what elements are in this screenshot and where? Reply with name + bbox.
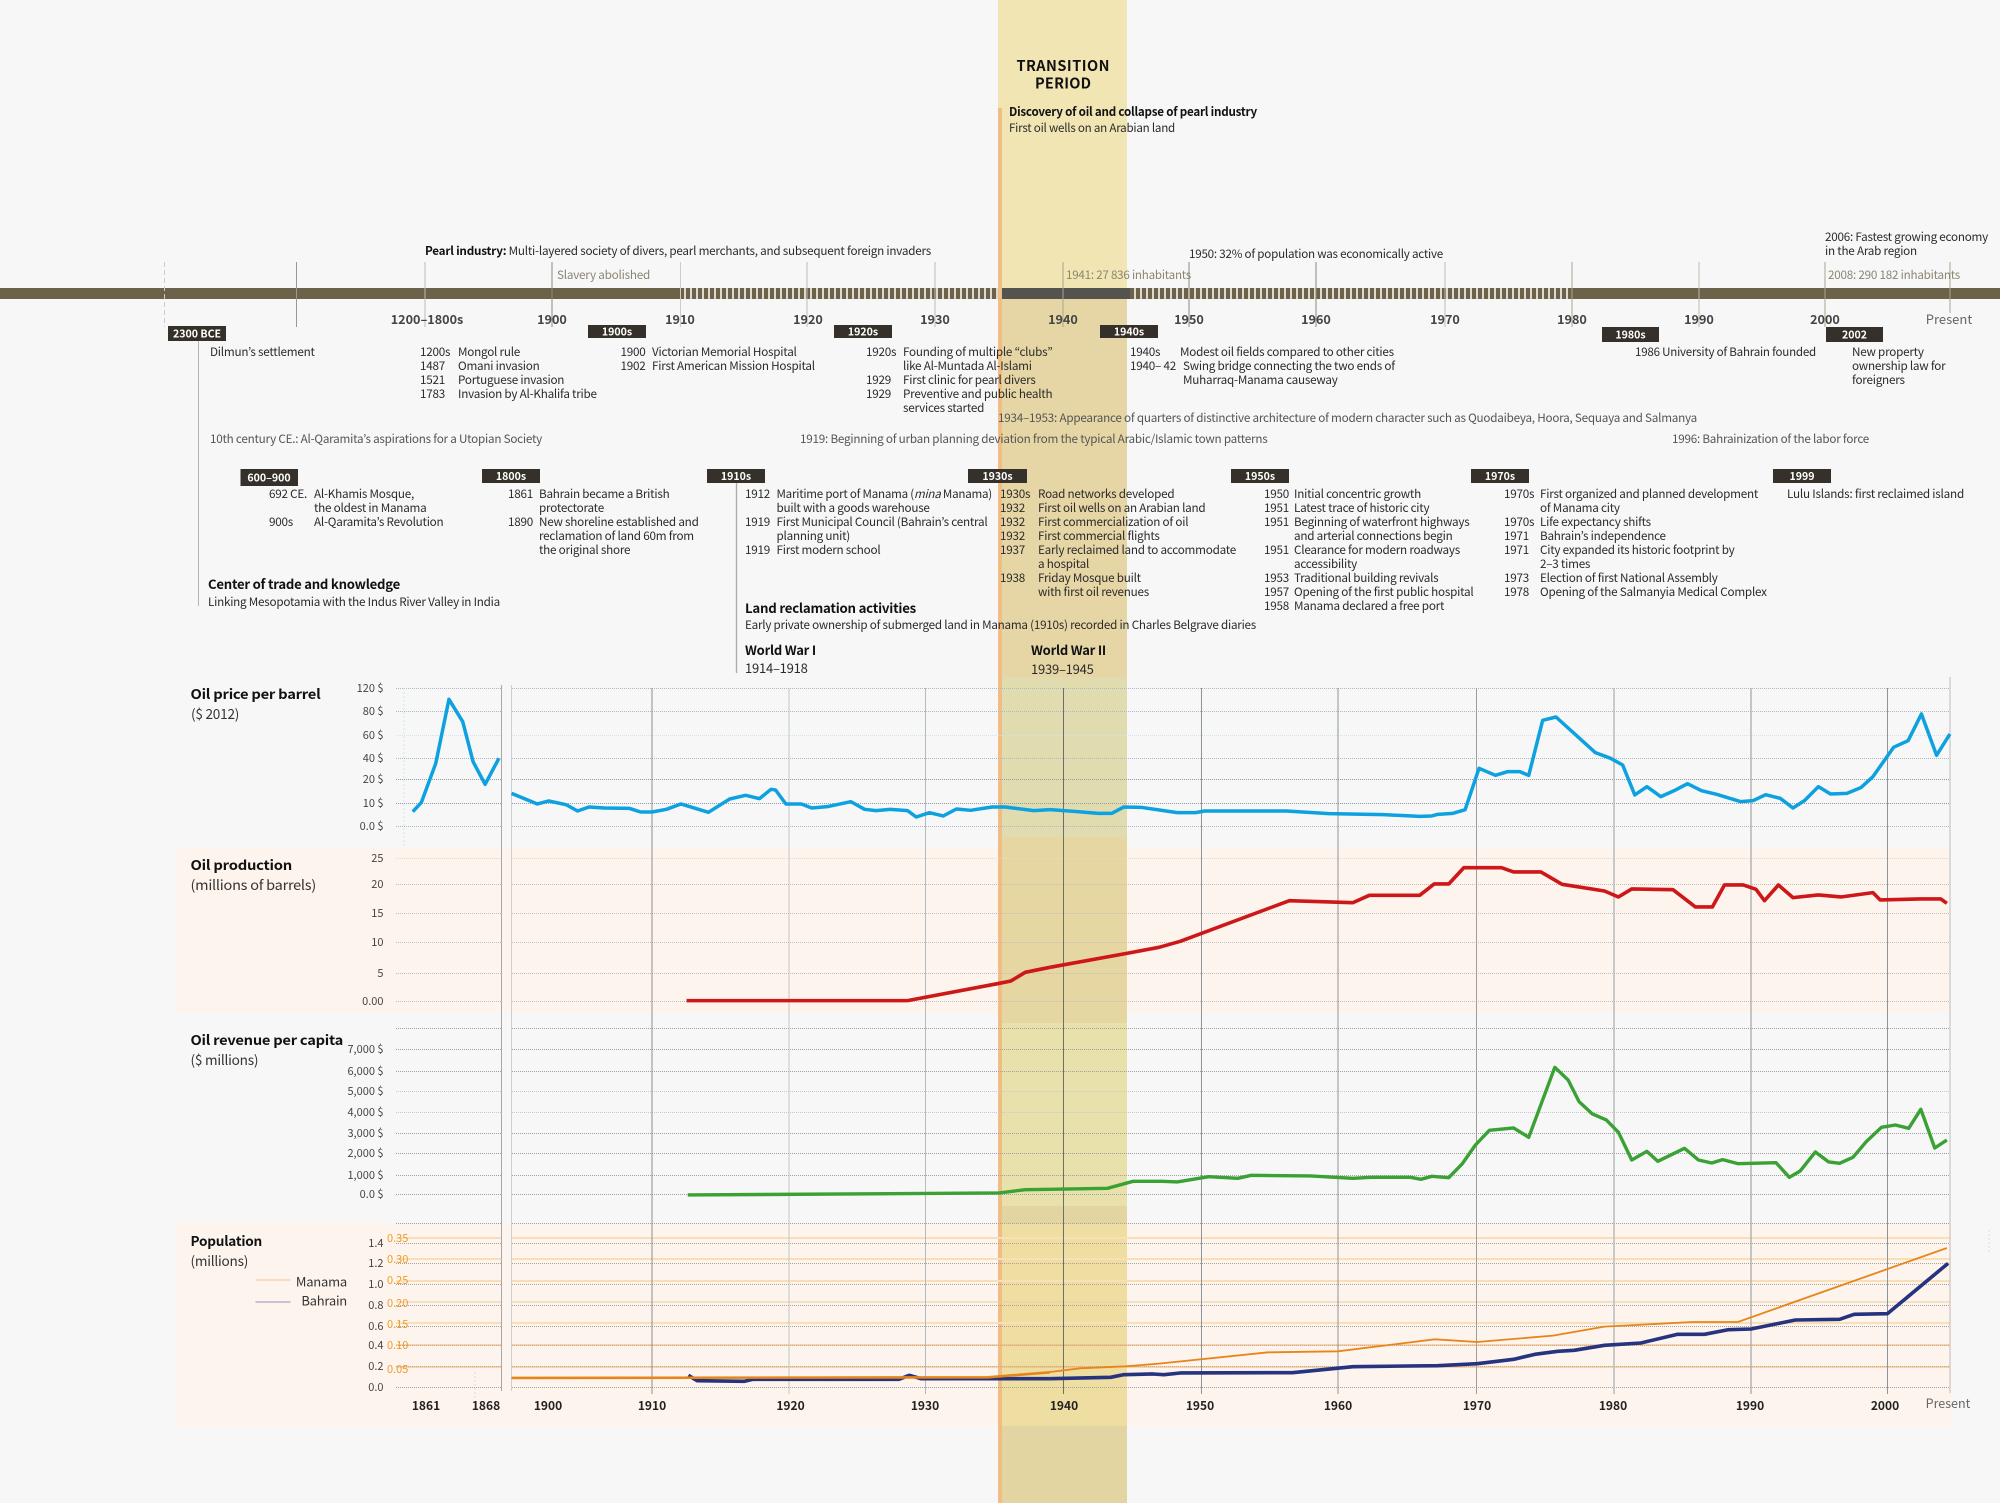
text block: 1800s [508, 485, 699, 558]
text block: 2002 [1852, 343, 1946, 388]
leader line: 1910s [736, 483, 738, 673]
text block: 1970s: City expanded its historic footprint by [1540, 541, 1735, 558]
x axis labels: 1970 [1463, 1397, 1491, 1414]
text block: 1910s: 1919 [745, 513, 770, 530]
tag: 1920s: 1920s [848, 324, 878, 340]
text block: 1970s: 1970s [1504, 513, 1535, 530]
annotation: 1950 population: 1950: 32% of population was economically active [1189, 245, 1443, 262]
text block: 1950s: Opening of the first public hospital [1294, 583, 1473, 600]
tag: 1930s [968, 469, 1027, 484]
axis labels: Manama scale: 0.30 [387, 1251, 408, 1267]
chart title: oil revenue [190, 1029, 343, 1069]
tag: 1800s: 1800s [496, 469, 526, 484]
text block: 1950s: 1957 [1264, 583, 1289, 600]
axis labels: oil revenue: 3,000 $ [347, 1125, 384, 1141]
text block: 1920s: First clinic for pearl divers [903, 371, 1036, 388]
x axis labels: Present [1926, 1393, 1971, 1412]
timeline year labels [391, 309, 1972, 328]
timeline year labels: 1900 [537, 309, 567, 328]
axis labels: Bahrain scale: 0.4 [368, 1337, 384, 1353]
timeline ticks [164, 262, 1950, 327]
text block: 1930s: Early reclaimed land to accommodate [1038, 541, 1236, 558]
line: oil production [687, 868, 1947, 1001]
text block: 1970s: 1973 [1504, 569, 1529, 586]
gridlines [396, 688, 1950, 1388]
annotation: 2006 economy: 2006: Fastest growing economy [1825, 228, 1988, 245]
axis labels: oil revenue: 5,000 $ [347, 1083, 384, 1099]
text block: 1910s: 1912 [745, 485, 770, 502]
annotation: 1996: 1996: Bahrainization of the labor force [1672, 430, 1869, 447]
text block: World War II: 1939–1945 [1031, 659, 1094, 678]
axis labels: oil production: 15 [371, 905, 384, 921]
axis labels: oil price: 60 $ [363, 727, 384, 743]
tag: 1950s: 1950s [1245, 469, 1275, 484]
axis labels: Bahrain scale: 1.2 [368, 1255, 384, 1271]
x axis labels: 1980 [1599, 1397, 1627, 1414]
chart: population [190, 1230, 1971, 1414]
tag: 1970s [1471, 469, 1529, 484]
text block: 1940s [1130, 343, 1396, 388]
timeline bar [0, 288, 2000, 299]
tag: 1930s: 1930s [982, 469, 1013, 484]
text block: 1900s: First American Mission Hospital [652, 357, 815, 374]
text block: 1970s: 2–3 times [1540, 555, 1591, 572]
transition period band [998, 0, 1127, 1503]
x axis labels: 1990 [1736, 1397, 1764, 1414]
axis labels: Manama scale: 0.15 [387, 1316, 408, 1332]
heading: transition period [1016, 55, 1110, 94]
text block: 1930s [1000, 485, 1236, 600]
text block: World War II: World War II [1031, 640, 1106, 659]
text block: 1910s: built with a goods warehouse [776, 499, 930, 516]
text block: 1800s: protectorate [539, 499, 604, 516]
text block: 1950s: 1953 [1264, 569, 1289, 586]
annotation: 2006 economy: in the Arab region [1825, 242, 1917, 259]
text block: 1970s: Bahrain’s independence [1540, 527, 1666, 544]
x axis labels: 1861 [412, 1397, 440, 1414]
axis labels: oil production: 0.00 [362, 993, 384, 1009]
text block: 1200-1800s: Omani invasion [458, 357, 540, 374]
text block: 1940s: 1940– 42 [1130, 357, 1176, 374]
text: Lulu Islands: Lulu Islands: first reclaimed island [1787, 485, 1964, 502]
x axis labels: 1930 [911, 1397, 939, 1414]
text block: 1910s: First Municipal Council (Bahrain’s central [776, 513, 987, 530]
text block: 1930s: First oil wells on an Arabian land [1038, 499, 1205, 516]
axis labels: Manama scale: 0.25 [387, 1272, 408, 1288]
text block: discovery of oil: First oil wells on an Arabian land [1009, 119, 1175, 136]
axis labels: oil price: 120 $ [357, 680, 384, 696]
x axis labels: 1868 [472, 1397, 500, 1414]
axis labels: oil production [362, 850, 384, 1009]
panel: oil production background [176, 847, 1950, 1013]
chart title: population: Population [190, 1230, 262, 1250]
text block: 1930s: First commercial flights [1038, 527, 1160, 544]
text block: 1200-1800s: Invasion by Al-Khalifa tribe [458, 385, 597, 402]
text block: land reclamation: Early private ownership of submerged land in Manama (1910s) recorded in Charles Belgrave diaries [745, 616, 1257, 633]
axis labels: oil revenue: 0.0 $ [360, 1186, 384, 1202]
text: Dilmun's settlement: Dilmun’s settlement [210, 343, 316, 360]
x axis labels: 1900 [534, 1397, 562, 1414]
text block: 600-900: Al-Khamis Mosque, [314, 485, 414, 502]
legend: population [256, 1272, 347, 1310]
text block: 1920s [866, 343, 1053, 416]
text block: 1200-1800s: 1783 [420, 385, 445, 402]
text block: 1910s [745, 485, 992, 558]
axis labels: oil price: 20 $ [363, 771, 384, 787]
line: Bahrain population [688, 1263, 1948, 1381]
heading: transition period: TRANSITION [1016, 55, 1110, 76]
text block: 1970s: First organized and planned development [1540, 485, 1759, 502]
axis labels: Manama scale: 0.10 [387, 1337, 408, 1353]
text block: 1940s: Modest oil fields compared to other cities [1180, 343, 1395, 360]
text block: center of trade: Center of trade and knowledge [208, 574, 400, 593]
annotation: 10th century: 10th century CE.: Al-Qaramita’s aspirations for a Utopian Society [210, 430, 542, 447]
annotation: pearl industry: Pearl industry: Multi-layered society of divers, pearl merchants, and subsequent foreign invaders [425, 242, 932, 259]
text block: 1930s: 1938 [1000, 569, 1025, 586]
text block: 1920s: like Al-Muntada Al-Islami [903, 357, 1032, 374]
text block: 2002: ownership law for [1852, 357, 1946, 374]
axis labels: oil production: 5 [377, 965, 384, 981]
text block: 1940s: 1940s [1130, 343, 1161, 360]
panel: population background [176, 1223, 1953, 1426]
x axis labels: 1920 [776, 1397, 805, 1414]
timeline year labels: Present [1926, 309, 1972, 328]
axis labels: Manama scale: 0.20 [387, 1295, 408, 1311]
text block: 1900s: 1902 [620, 357, 646, 374]
text block: 1200-1800s: 1487 [420, 357, 445, 374]
text block: 1950s: 1951 [1264, 513, 1289, 530]
text block: 1920s: Preventive and public health [903, 385, 1052, 402]
chart title: population: (millions) [190, 1250, 248, 1270]
text block: 600-900: 900s [269, 513, 294, 530]
text block: 1930s: 1930s [1000, 485, 1031, 502]
text block: 1950s: 1951 [1264, 541, 1289, 558]
text block: World War I: World War I [745, 640, 816, 659]
tag: 1999 [1773, 469, 1831, 484]
text block: 1930s: a hospital [1038, 555, 1089, 572]
text block: 1900s [620, 343, 815, 374]
text block: 1950s: Clearance for modern roadways [1294, 541, 1461, 558]
text block: 1200-1800s: Mongol rule [458, 343, 520, 360]
x axis labels: 1940 [1050, 1397, 1078, 1414]
axis labels: Bahrain scale: 0.0 [368, 1379, 384, 1395]
text block: 1970s [1504, 485, 1767, 600]
text block: 1970s: 1970s [1504, 485, 1535, 502]
text block: 1930s: 1932 [1000, 527, 1025, 544]
timeline year labels: 1950 [1174, 309, 1204, 328]
text block: 1970s: 1978 [1504, 583, 1529, 600]
text block: 1940s: Muharraq-Manama causeway [1183, 371, 1338, 388]
line: Manama population [512, 1248, 1947, 1378]
tag: 2002: 2002 [1842, 328, 1867, 342]
tag: 1970s: 1970s [1485, 469, 1515, 484]
tag: 1940s [1100, 324, 1158, 340]
text block: 1970s: 1971 [1504, 541, 1529, 558]
timeline year labels: 1990 [1684, 309, 1714, 328]
text block: 2002: New property [1852, 343, 1924, 360]
axis labels: oil production: 25 [371, 850, 384, 866]
text block: 1950s: and arterial connections begin [1294, 527, 1453, 544]
text block: 1920s: 1920s [866, 343, 897, 360]
chart: oil price per barrel [190, 680, 1950, 834]
timeline year labels: 1970 [1430, 309, 1460, 328]
text block: 1930s: Road networks developed [1038, 485, 1174, 502]
text block: 1950s: accessibility [1294, 555, 1357, 572]
text block: World War I: 1914–1918 [745, 658, 808, 677]
text block: 1950s: 1958 [1264, 597, 1289, 614]
text block: 1910s: Maritime port of Manama (mina Manama) [776, 485, 992, 502]
text block: 1950s: Initial concentric growth [1294, 485, 1421, 502]
text block: 1920s: 1929 [866, 371, 891, 388]
text block: 1950s: Manama declared a free port [1294, 597, 1445, 614]
axis labels: oil production: 10 [371, 934, 384, 950]
leader line: 2300 BCE [198, 341, 200, 606]
tag: 1910s [707, 469, 765, 484]
chart title: oil production: Oil production [190, 854, 292, 874]
tag: 600-900: 600–900 [247, 470, 291, 486]
text block: World War I [745, 640, 816, 677]
text block: 1800s: Bahrain became a British [539, 485, 670, 502]
x axis labels: 1960 [1324, 1397, 1352, 1414]
text block: 1800s: reclamation of land 60m from [539, 527, 694, 544]
chart title: oil revenue: Oil revenue per capita [190, 1029, 343, 1049]
x axis labels [412, 1393, 1971, 1414]
axis labels: oil revenue: 7,000 $ [347, 1041, 384, 1057]
text block: 1950s: 1951 [1264, 499, 1289, 516]
legend: population: Manama [296, 1272, 347, 1290]
axis labels: oil price: 10 $ [363, 795, 384, 811]
text block: 1900s: 1900 [620, 343, 646, 360]
text block: 1910s: First modern school [776, 541, 880, 558]
text block: 1800s: New shoreline established and [539, 513, 699, 530]
x axis labels: 1950 [1186, 1397, 1214, 1414]
legend: population: Bahrain [301, 1290, 347, 1310]
axis labels: oil revenue: 6,000 $ [347, 1063, 384, 1079]
text block: 1200-1800s: Portuguese invasion [458, 371, 564, 388]
axis labels: Bahrain scale: 0.8 [368, 1297, 384, 1313]
text block: 1800s: 1890 [508, 513, 533, 530]
text block: 1930s: 1932 [1000, 499, 1025, 516]
text block: 600-900: the oldest in Manama [314, 499, 426, 516]
text block: 1930s: Friday Mosque built [1038, 569, 1142, 586]
text block: discovery of oil: Discovery of oil and collapse of pearl industry [1009, 102, 1257, 120]
tag: 2300 BCE: 2300 BCE [173, 326, 221, 342]
tag: 1920s [834, 324, 892, 340]
x axis labels: 2000 [1871, 1397, 1899, 1414]
text block: center of trade [208, 574, 500, 610]
transition period marker line [998, 108, 1002, 1503]
chart title: oil production: (millions of barrels) [190, 874, 316, 894]
text block: 1920s: services started [903, 399, 984, 416]
timeline year labels: 1980 [1557, 309, 1587, 328]
timeline year labels: 2000 [1810, 309, 1840, 328]
text block: 1950s: 1950 [1264, 485, 1289, 502]
chart title: oil revenue: ($ millions) [190, 1049, 258, 1069]
axis labels: Bahrain scale: 1.0 [368, 1276, 384, 1292]
chart title: oil production [190, 854, 316, 894]
annotation: slavery abolished: Slavery abolished [557, 266, 650, 283]
text block: 1950s: Traditional building revivals [1294, 569, 1439, 586]
text block: 1930s: with first oil revenues [1038, 583, 1150, 600]
text block: land reclamation [745, 598, 1257, 633]
tag: 1980s [1602, 327, 1659, 342]
tag: 1900s [588, 324, 646, 340]
text block: 1970s: Opening of the Salmanyia Medical Complex [1540, 583, 1767, 600]
axis labels: oil revenue [347, 1041, 384, 1202]
axis labels: oil revenue: 4,000 $ [347, 1104, 384, 1120]
text block: 1920s: Founding of multiple “clubs” [903, 343, 1053, 360]
timeline year labels: 1930 [920, 309, 950, 328]
text block: 1970s: Life expectancy shifts [1540, 513, 1652, 530]
timeline year labels: 1200–1800s [391, 309, 463, 328]
axis labels: Bahrain scale: 0.2 [368, 1358, 384, 1374]
axis labels: oil price: 0.0 $ [360, 818, 384, 834]
axis labels: oil price [357, 680, 384, 834]
text block: 1930s: 1932 [1000, 513, 1025, 530]
chart title: population [190, 1230, 262, 1270]
annotation: 2006 economy [1825, 228, 1988, 259]
text block: 1930s: 1937 [1000, 541, 1025, 558]
axis labels: oil revenue: 2,000 $ [347, 1145, 384, 1161]
axis labels: oil price: 80 $ [363, 703, 384, 719]
text block: 1200-1800s: 1200s [420, 343, 451, 360]
tag: 1999: 1999 [1789, 469, 1815, 484]
text block: 1970s: of Manama city [1540, 499, 1620, 516]
text block: 1950s [1264, 485, 1473, 614]
timeline year labels: 1920 [793, 309, 823, 328]
axis labels: oil production: 20 [371, 876, 384, 892]
axis labels: Manama scale: 0.05 [387, 1361, 408, 1377]
axis labels: Bahrain scale [368, 1235, 384, 1395]
tag: 1900s: 1900s [602, 324, 632, 340]
axis labels: oil revenue: 1,000 $ [347, 1167, 384, 1183]
annotation: 1919 urban planning: 1919: Beginning of urban planning deviation from the typical Arabic/Islamic town patterns [800, 430, 1268, 447]
text block: 1930s: First commercialization of oil [1038, 513, 1188, 530]
text block: 1920s: 1929 [866, 385, 891, 402]
text block: 1950s: Beginning of waterfront highways [1294, 513, 1470, 530]
tag: 1980s: 1980s [1615, 328, 1646, 342]
text block: land reclamation: Land reclamation activities [745, 598, 916, 617]
timeline year labels: 1910 [665, 309, 695, 328]
text block: discovery of oil [1009, 102, 1257, 136]
line: oil price [413, 699, 1950, 817]
heading: transition period: PERIOD [1035, 72, 1091, 94]
text block: 1800s: 1861 [508, 485, 533, 502]
chart title: oil price: Oil price per barrel [190, 683, 320, 703]
text block: 600-900: 692 CE. [269, 485, 307, 502]
annotation: 1934-1953: 1934–1953: Appearance of quarters of distinctive architecture of modern character such as Quodaibeya, Hoora, Sequaya and Salmanya [998, 409, 1697, 426]
x axis labels: 1910 [638, 1397, 666, 1414]
annotation: 2008 inhabitants: 2008: 290 182 inhabitants [1828, 266, 1961, 283]
text block: World War II [1031, 640, 1106, 678]
text block: 1970s: 1971 [1504, 527, 1529, 544]
text block: 1940s: Swing bridge connecting the two ends of [1183, 357, 1396, 374]
axis labels: Manama scale [387, 1230, 408, 1377]
chart: oil revenue per capita [190, 1029, 1947, 1202]
text block: 2002: foreigners [1852, 371, 1905, 388]
chart title: oil price: ($ 2012) [191, 703, 239, 723]
axis labels: Bahrain scale: 0.6 [368, 1318, 384, 1334]
text block: 1900s: Victorian Memorial Hospital [652, 343, 797, 360]
tag: 1940s: 1940s [1114, 324, 1144, 340]
tag: 1800s [482, 469, 540, 484]
chart title: oil price [190, 683, 320, 723]
axis labels: Bahrain scale: 1.4 [368, 1235, 384, 1251]
axis labels: oil price: 40 $ [363, 750, 384, 766]
text block: 1910s: 1919 [745, 541, 770, 558]
tag: 1910s: 1910s [721, 469, 751, 484]
tag: 1950s [1231, 469, 1289, 484]
annotation: 1941 inhabitants: 1941: 27 836 inhabitants [1066, 266, 1192, 283]
text block: 1910s: planning unit) [776, 527, 850, 544]
timeline year labels: 1940 [1048, 309, 1078, 328]
tag: 600-900 [240, 469, 298, 486]
text block: center of trade: Linking Mesopotamia with the Indus River Valley in India [208, 593, 500, 610]
text block: 600-900: Al-Qaramita’s Revolution [314, 513, 444, 530]
timeline year labels: 1960 [1301, 309, 1331, 328]
text: 1986 university: 1986 University of Bahrain founded [1635, 343, 1816, 360]
axis labels: Manama scale: 0.35 [387, 1230, 408, 1246]
population secondary gridlines [396, 1238, 1950, 1367]
vertical year lines [404, 677, 1989, 1400]
text block: 1970s: Election of first National Assembly [1540, 569, 1718, 586]
line: oil revenue [688, 1067, 1947, 1195]
text block: 1800s: the original shore [539, 541, 630, 558]
tag: 2002 [1826, 327, 1883, 342]
text block: 1200-1800s: 1521 [420, 371, 445, 388]
text block: 600-900 [269, 485, 444, 530]
chart: oil production [190, 850, 1947, 1009]
text block: 1950s: Latest trace of historic city [1294, 499, 1429, 516]
text block: 1200-1800s [420, 343, 597, 402]
